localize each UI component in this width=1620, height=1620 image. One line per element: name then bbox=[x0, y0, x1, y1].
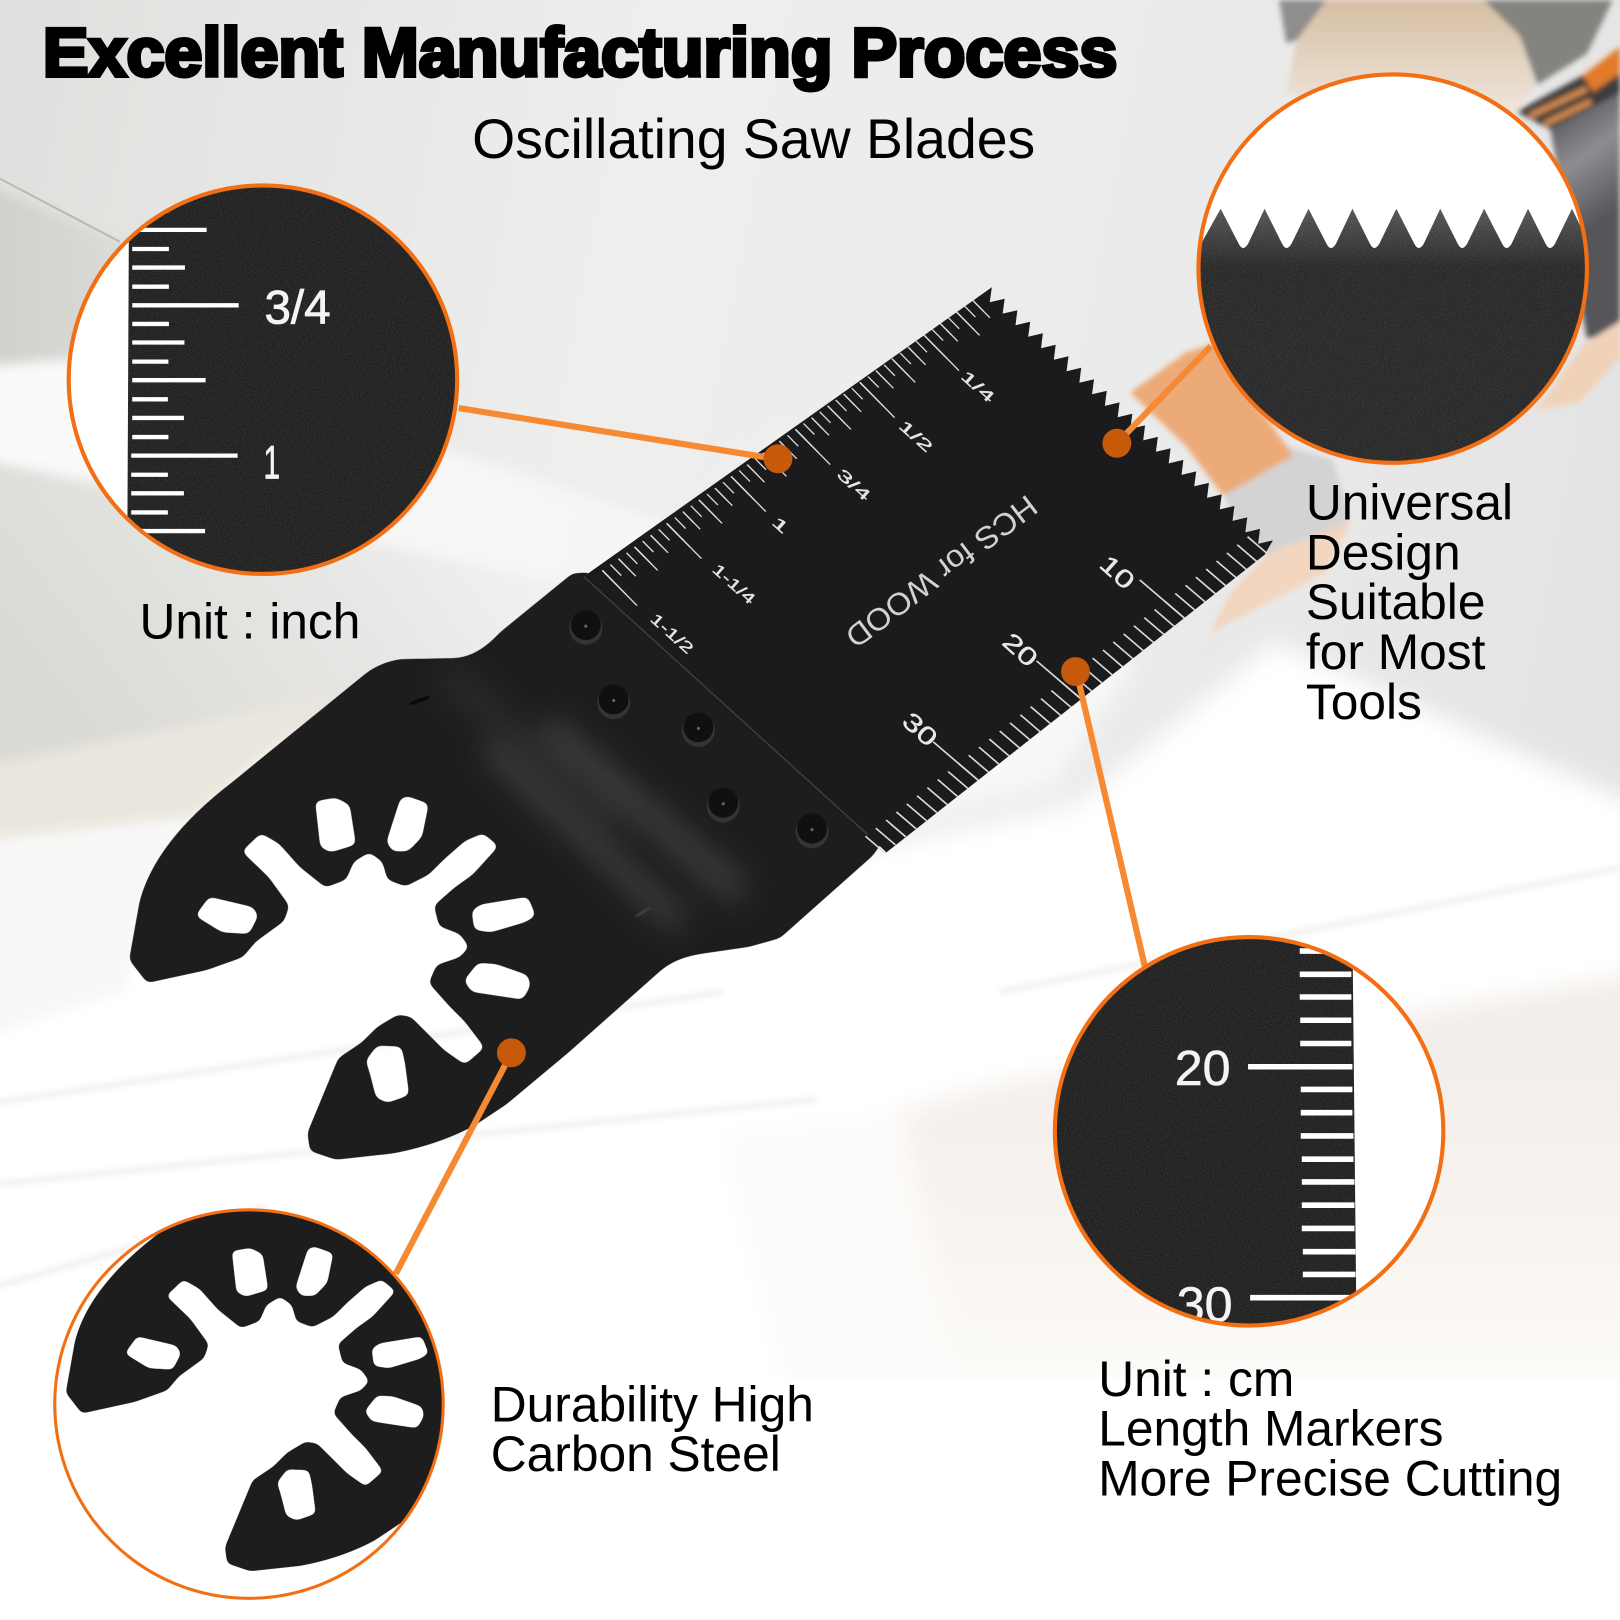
inch ruler ticks bbox=[607, 301, 997, 588]
inch ruler labels: 3/4 bbox=[833, 466, 874, 505]
magnified inch ticks bbox=[131, 211, 239, 531]
saw blade bbox=[129, 287, 1273, 1160]
callout circle: saw teeth close-up bbox=[1193, 74, 1591, 470]
blade body with teeth bbox=[584, 287, 1273, 852]
magnified centimetre ticks bbox=[1248, 951, 1356, 1298]
label: universal design: for Most bbox=[1306, 624, 1486, 680]
inch ruler labels: 1/4 bbox=[957, 368, 998, 407]
shank shading bbox=[444, 672, 740, 924]
label: universal design: Universal bbox=[1306, 475, 1513, 531]
label: unit cm: Unit : cm bbox=[1098, 1351, 1294, 1407]
blade shank and fan mount bbox=[129, 572, 889, 1160]
background tool and arm bbox=[1130, 0, 1620, 633]
inch ruler labels bbox=[647, 368, 998, 658]
callout circle: centimetre ruler close-up bbox=[1049, 930, 1443, 1333]
centimetre ruler ticks bbox=[862, 532, 1260, 845]
label: durability: Carbon Steel bbox=[491, 1426, 781, 1482]
label: universal design: Design bbox=[1306, 524, 1461, 580]
magnified label 30: 30 bbox=[1177, 1276, 1233, 1332]
label: unit inch: Unit : inch bbox=[139, 593, 360, 649]
callout circle: fan mount close-up bbox=[53, 1208, 445, 1600]
label: universal design: Tools bbox=[1306, 674, 1422, 730]
label: durability: Durability High bbox=[491, 1377, 814, 1433]
inch ruler labels: 1 bbox=[768, 514, 792, 537]
callout leader lines bbox=[396, 346, 1211, 1274]
magnified label 20: 20 bbox=[1175, 1040, 1230, 1096]
title: Excellent Manufacturing Process bbox=[43, 15, 1117, 91]
magnified label 1: 1 bbox=[263, 436, 280, 489]
label: unit cm: Length Markers bbox=[1098, 1400, 1443, 1456]
inch ruler labels: 1-1/2 bbox=[647, 611, 696, 658]
subtitle: Oscillating Saw Blades bbox=[472, 108, 1035, 170]
centimetre ruler labels bbox=[897, 551, 1140, 753]
centimetre ruler labels: 10 bbox=[1094, 551, 1140, 595]
centimetre ruler labels: 20 bbox=[997, 628, 1042, 673]
rivet dimples bbox=[569, 610, 829, 848]
inch ruler labels: 1-1/4 bbox=[709, 561, 759, 609]
callout anchor dots bbox=[497, 429, 1131, 1067]
surface scratch marks bbox=[408, 695, 652, 918]
magnified label 3/4: 3/4 bbox=[264, 281, 331, 334]
centimetre ruler labels: 30 bbox=[897, 708, 942, 753]
label: universal design: Suitable bbox=[1306, 574, 1485, 630]
label: unit cm: More Precise Cutting bbox=[1098, 1451, 1562, 1507]
inch ruler labels: 1/2 bbox=[895, 417, 936, 456]
blade marking: HCS for WOOD bbox=[839, 488, 1044, 655]
callout circle: inch ruler close-up bbox=[69, 176, 465, 589]
